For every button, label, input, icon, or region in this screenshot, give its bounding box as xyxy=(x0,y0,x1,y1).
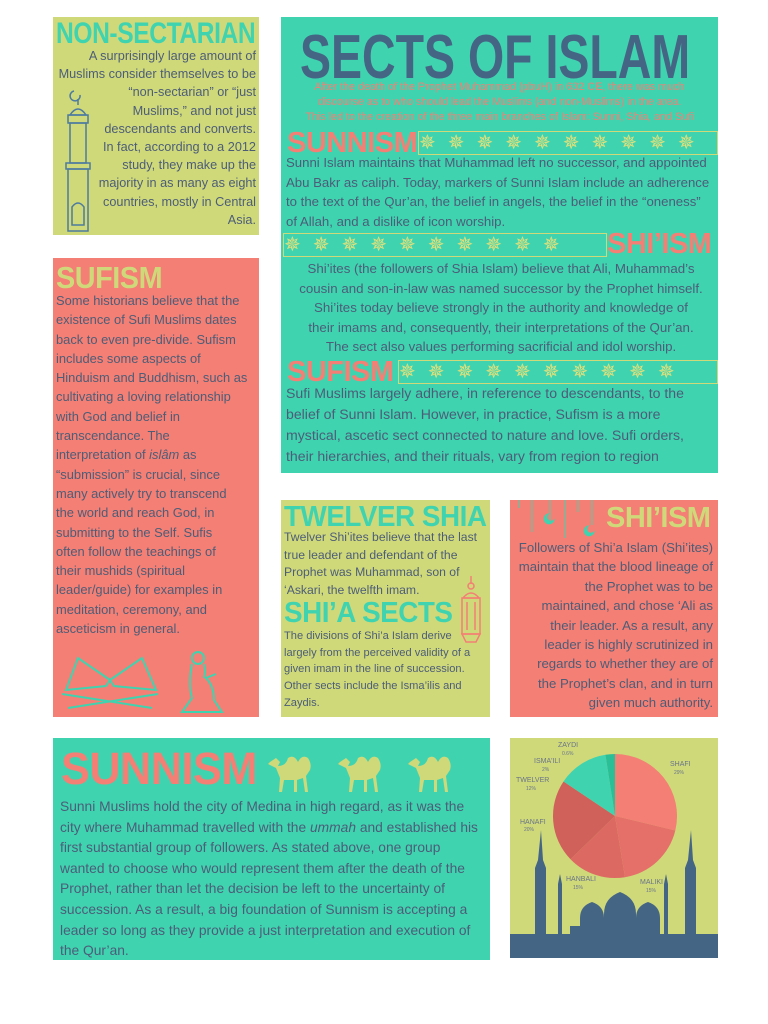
text: non-sectarian: “non-sectarian” or “just xyxy=(128,85,256,99)
text: sufism: often follow the teachings of xyxy=(56,544,216,559)
heading: shi'a sects: SHI’A SECTS xyxy=(284,597,452,629)
text: shi'ism: maintained, and chose ‘Ali as xyxy=(541,598,713,613)
text: twelver xyxy=(284,530,477,596)
icon: minaret xyxy=(65,90,91,232)
text: shi'ism xyxy=(519,540,714,710)
intro text xyxy=(305,81,694,123)
text: sufism: transcendance. The xyxy=(56,428,170,443)
text: sufism: asceticism in general. xyxy=(56,621,180,636)
text: shi'a sects: Zaydis. xyxy=(284,697,320,709)
icon: camels xyxy=(268,756,451,792)
text: shi'ism: the Prophet was to be xyxy=(585,579,713,594)
panel: shi'ism right xyxy=(510,500,718,717)
text: shi'ism: cousin and son-in-law was named successor by the Prophet himself. xyxy=(299,280,703,296)
heading: sunnism: SUNNISM xyxy=(287,127,417,159)
heading: twelver shia: TWELVER SHIA xyxy=(284,501,487,533)
icon: hanging moons xyxy=(518,500,595,538)
text: shi'ism: regards to whether they are of xyxy=(537,656,713,671)
text: sunnism: Prophet, rather than let the decision be left to the uncertainty of xyxy=(60,881,445,896)
text: shi'ism: Followers of Shi’a Islam (Shi’ites) xyxy=(519,540,713,555)
text: shi'ism: their leader. As a result, any xyxy=(550,618,713,633)
text: twelver: Twelver Shi’ites believe that the last xyxy=(284,530,477,544)
text: sufism: leader/guide) for examples in xyxy=(56,582,222,597)
text: sufism: the world and reach God, in xyxy=(56,505,214,520)
pie chart: ISMA'ILI xyxy=(534,758,560,765)
text: shi'ism: Shi’ites today believe strongly in the authority and knowledge of xyxy=(314,300,688,315)
text: shi'ism: The sect also values performing sacrificial and idol worship. xyxy=(326,339,676,354)
text: shi'a sects: Other sects include the Isma’ilis and xyxy=(284,680,462,692)
text: sunnism: Abu Bakr as caliph. Today, markers of Sunni Islam include an adherence xyxy=(286,174,709,190)
text: non-sectarian: descendants and converts. xyxy=(104,122,256,136)
text: sunnism: leader so long as they provide a just interpretation and execution of xyxy=(60,923,470,938)
text: sufism: their mushids (spiritual xyxy=(56,563,185,578)
text: sufism: cultivating a loving relationship xyxy=(56,389,231,404)
text: sufism: with God and belief in xyxy=(56,409,180,424)
text: sunnism: the Qur’an. xyxy=(60,943,129,958)
text: sunnism: first substantial group of followers. As stated above, one group xyxy=(60,840,440,855)
text: sufism: many actively try to transcend xyxy=(56,486,227,501)
text: non-sectarian: A surprisingly large amount of xyxy=(89,49,256,63)
text: shi'ism: the Prophet’s clan, and in turn xyxy=(538,676,713,691)
text: sufism: includes some aspects of xyxy=(56,351,201,366)
pie chart: HANAFI xyxy=(520,819,546,826)
text: sufism: meditation, ceremony, and xyxy=(56,602,207,617)
text: sunnism: city where Muhammad travelled with the ummah and established his xyxy=(60,820,478,835)
text: sufism: Hinduism and Buddhism, such as xyxy=(56,370,247,385)
text: non-sectarian: study, they make up the xyxy=(122,158,256,172)
panel: pie chart xyxy=(510,738,718,958)
heading: non-sectarian: NON-SECTARIAN xyxy=(56,17,255,50)
pie chart: 15% xyxy=(646,888,657,894)
decorative band 2: ✵✵✵✵✵✵✵✵✵✵ xyxy=(284,234,572,256)
text: sufism: Some historians believe that the xyxy=(56,293,239,308)
text: sunnism: Sunni Muslims hold the city of Medina in high regard, as it was the xyxy=(60,799,464,814)
text: shi'a sects: largely from the perceived validity of a xyxy=(284,647,470,659)
text: sufism: back to even pre-divide. Sufism xyxy=(56,332,236,347)
pie chart: MALIKI xyxy=(640,879,663,886)
decorative band: ✵✵✵✵✵✵✵✵✵✵ xyxy=(419,132,707,154)
panel: non-sectarian xyxy=(53,17,259,235)
text: shi'ism xyxy=(299,261,703,354)
pie chart: 2% xyxy=(542,767,550,773)
heading: sunnism: SUNNISM xyxy=(61,743,257,794)
text: sufism: “submission” is crucial, since xyxy=(56,467,220,482)
text: sunnism: succession. As a result, a big foundation of Sunnism is accepting a xyxy=(60,902,467,917)
text: twelver: ‘Askari, the twelfth imam. xyxy=(284,582,419,596)
pie chart: 29% xyxy=(674,770,685,776)
icon: lantern xyxy=(460,576,482,643)
text: non-sectarian: In fact, according to a 2012 xyxy=(103,140,256,154)
text: shi'a sects xyxy=(284,630,470,709)
text: non-sectarian: majority in as many as eight xyxy=(99,176,256,190)
text: sunnism xyxy=(286,155,709,228)
text: twelver: true leader and defendant of the xyxy=(284,548,457,562)
pie chart: HANBALI xyxy=(566,876,596,883)
text: sufism: belief of Sunni Islam. However, in practice, Sufism is a more xyxy=(286,406,660,422)
heading: sufism: SUFISM xyxy=(56,260,162,295)
intro text: This led to the creation of the three main branches of Islam: Sunni, Shia, and Sufi xyxy=(305,111,694,123)
text: sufism: submitting to the Self. Sufis xyxy=(56,525,212,540)
text: sufism xyxy=(286,385,684,464)
icon: praying figure xyxy=(180,651,224,713)
icon: quran stand xyxy=(62,656,158,709)
text: twelver: Prophet was Muhammad, son of xyxy=(284,565,459,579)
text: shi'ism: Shi’ites (the followers of Shia Islam) believe that Ali, Muhammad’s xyxy=(307,261,694,276)
decorative band 3: ✵✵✵✵✵✵✵✵✵✵ xyxy=(399,361,687,383)
text: sufism xyxy=(56,293,247,636)
title: SECTS OF ISLAM xyxy=(300,23,690,92)
pie chart: 0.6% xyxy=(562,751,574,757)
text: shi'ism: maintain that the blood lineage of xyxy=(519,559,713,574)
text: non-sectarian: Asia. xyxy=(228,213,256,227)
heading: shi'ism: SHI’ISM xyxy=(606,502,710,534)
intro text: After the death of the Prophet Muhammad (pbuH) in 632 CE, there was much xyxy=(314,81,685,93)
pie chart: TWELVER xyxy=(516,777,549,784)
pie chart: 15% xyxy=(573,885,584,891)
heading: shi'ism: SHI’ISM xyxy=(607,228,711,260)
pie chart: SHAFI xyxy=(670,761,691,768)
text: sunnism: Sunni Islam maintains that Muhammad left no successor, and appointed xyxy=(286,155,707,170)
text: sufism: their hierarchies, and their rituals, vary from region to region xyxy=(286,448,659,464)
text: sufism: interpretation of islâm as xyxy=(56,447,196,462)
panel: sufism left xyxy=(53,258,259,717)
text: non-sectarian xyxy=(59,49,256,227)
text: shi'ism: given much authority. xyxy=(589,695,713,710)
text: sufism: Sufi Muslims largely adhere, in reference to descendants, to the xyxy=(286,385,684,401)
pie chart: ZAYDI xyxy=(558,742,578,749)
panel: twelver shia xyxy=(281,500,490,717)
text: shi'ism: their imams and, consequently, their interpretations of the Qur’an. xyxy=(308,320,694,334)
pie chart: 12% xyxy=(526,786,537,792)
text: sunnism: wanted to choose who would represent them after the death of the xyxy=(60,861,465,876)
text: shi'ism: leader is highly scrutinized in xyxy=(544,637,713,652)
text: non-sectarian: Muslims,” and not just xyxy=(133,104,256,118)
text: sunnism: of Allah, and a dislike of icon worship. xyxy=(286,214,505,228)
text: sunnism: to the text of the Qur’an, the belief in angels, the belief in the “oneness” xyxy=(286,194,701,209)
pie chart xyxy=(516,742,691,894)
mosque silhouette xyxy=(510,830,718,958)
heading: sufism: SUFISM xyxy=(287,356,394,388)
text: shi'a sects: given imam in the line of succession. xyxy=(284,663,465,675)
text: sufism: existence of Sufi Muslims dates xyxy=(56,312,237,327)
text: sunnism xyxy=(60,799,478,958)
text: shi'a sects: The divisions of Shi’a Islam derive xyxy=(284,630,452,642)
panel: sects of islam main xyxy=(281,17,718,473)
text: non-sectarian: countries, mostly in Central xyxy=(103,195,256,209)
intro text: discourse as to who should lead the Muslims (and non-Muslims) in the area. xyxy=(318,96,681,108)
pie chart: 20% xyxy=(524,827,535,833)
panel: sunnism bottom xyxy=(53,738,490,960)
text: sufism: mystical, ascetic sect connected to nature and love. Sufi orders, xyxy=(286,427,684,443)
text: non-sectarian: Muslims consider themselves to be xyxy=(59,67,256,81)
